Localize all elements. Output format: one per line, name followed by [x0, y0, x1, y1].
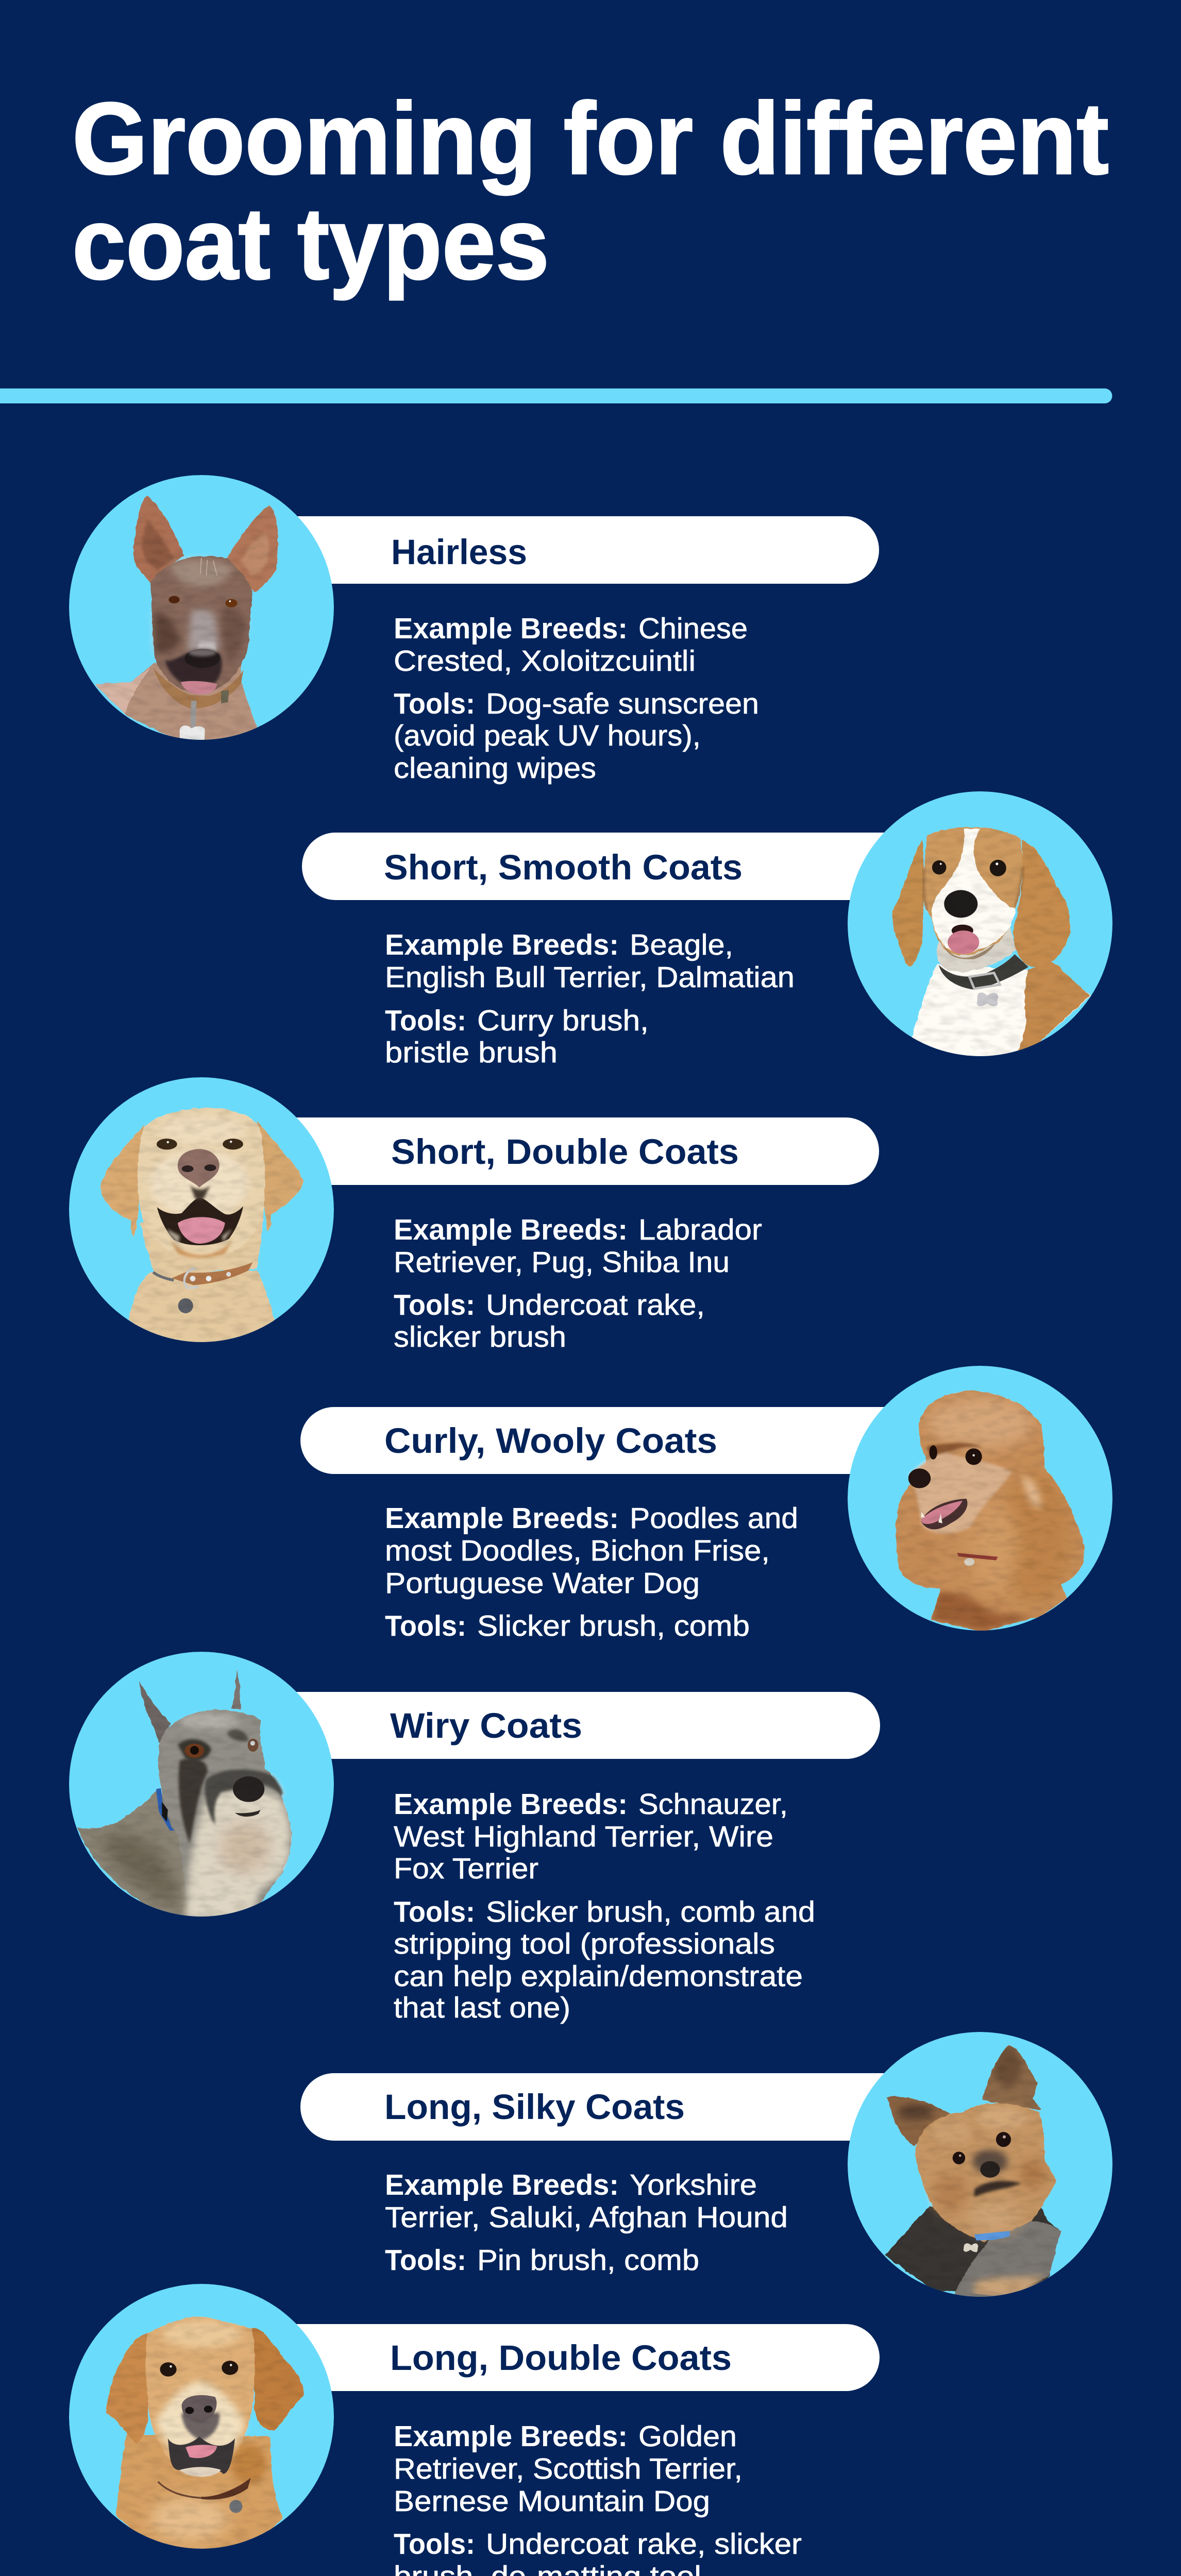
text: short double details: Labrador — [638, 1213, 762, 1246]
heading pill: curly wooly — [300, 1407, 980, 1474]
heading pill: short smooth: Short, Smooth Coats — [384, 848, 743, 887]
text: hairless details: (avoid peak UV hours), — [394, 719, 701, 752]
heading pill: long double — [201, 2324, 880, 2391]
heading pill: curly wooly: Curly, Wooly Coats — [384, 1421, 717, 1461]
text: wiry details — [394, 1788, 815, 2024]
text: short smooth details: Beagle, — [630, 928, 733, 961]
title: Grooming for different — [72, 81, 1109, 195]
panel: wiry coats — [69, 1652, 880, 2024]
text: short double details: Example Breeds: — [394, 1213, 628, 1246]
text: wiry details: that last one) — [394, 1991, 570, 2024]
text: curly wooly details — [385, 1502, 798, 1642]
header accent bar — [0, 388, 1112, 403]
text: hairless details: Example Breeds: — [394, 612, 628, 645]
heading pill: long double: Long, Double Coats — [390, 2338, 732, 2378]
text: short double details — [394, 1213, 762, 1353]
photo: schnauzer in circle — [69, 1652, 334, 1918]
text: wiry details: West Highland Terrier, Wire — [394, 1820, 773, 1853]
text: wiry details: can help explain/demonstrate — [394, 1960, 803, 1993]
text: long double details: Retriever, Scottish Terrier, — [394, 2452, 743, 2485]
text: long double details — [394, 2420, 802, 2576]
text: hairless details: Crested, Xoloitzcuintli — [394, 645, 696, 677]
photo: hairless dog in circle — [69, 475, 334, 741]
text: hairless details: Tools: — [394, 687, 475, 720]
text: short smooth details: Curry brush, — [477, 1004, 649, 1037]
photo: labrador in circle — [69, 1077, 334, 1343]
text: short smooth details: Tools: — [385, 1004, 466, 1037]
heading pill: wiry: Wiry Coats — [390, 1706, 582, 1745]
panel: curly, wooly coats — [300, 1366, 1112, 1642]
panel: hairless — [69, 475, 879, 785]
text: wiry details: Fox Terrier — [394, 1852, 538, 1885]
text: long silky details: Yorkshire — [630, 2168, 757, 2201]
heading pill: long silky — [300, 2073, 980, 2141]
panel: long, double coats — [69, 2284, 880, 2576]
title — [72, 81, 1109, 300]
text: wiry details: Schnauzer, — [638, 1788, 788, 1821]
text: long double details: Example Breeds: — [394, 2420, 628, 2453]
photo: beagle in circle — [848, 791, 1112, 1059]
text: long double details: Bernese Mountain Dog — [394, 2485, 710, 2518]
text: wiry details: Example Breeds: — [394, 1788, 628, 1821]
text: short smooth details: bristle brush — [385, 1036, 558, 1069]
text: wiry details: Tools: — [394, 1895, 475, 1928]
text: short double details: slicker brush — [394, 1320, 566, 1353]
heading pill: hairless — [201, 516, 879, 584]
heading pill: short double — [201, 1117, 879, 1185]
text: curly wooly details: Example Breeds: — [385, 1502, 619, 1535]
heading pill: wiry — [201, 1692, 880, 1759]
text: hairless details: Dog-safe sunscreen — [486, 687, 759, 720]
text: curly wooly details: Poodles and — [630, 1502, 798, 1535]
photo: poodle in circle — [848, 1366, 1112, 1632]
text: short double details: Tools: — [394, 1289, 475, 1321]
photo: yorkshire terrier in circle — [848, 2032, 1112, 2298]
title: coat types — [72, 187, 549, 300]
text: short double details: Retriever, Pug, Shiba Inu — [394, 1246, 730, 1279]
text: curly wooly details: Tools: — [385, 1609, 466, 1642]
text: wiry details: stripping tool (professionals — [394, 1927, 775, 1960]
heading pill: short double: Short, Double Coats — [391, 1132, 739, 1172]
text: curly wooly details: most Doodles, Bichon Frise, — [385, 1534, 770, 1567]
photo: golden retriever in circle — [69, 2284, 334, 2549]
heading pill: short smooth — [302, 833, 980, 900]
panel: short, double coats — [69, 1077, 879, 1353]
text: wiry details: Slicker brush, comb and — [486, 1895, 815, 1928]
text: long double details: Undercoat rake, slicker — [486, 2528, 802, 2561]
text: hairless details: Chinese — [638, 612, 748, 645]
text: long silky details: Terrier, Saluki, Afghan Hound — [385, 2201, 788, 2234]
text: long silky details: Example Breeds: — [385, 2168, 619, 2201]
text: short smooth details: English Bull Terrier, Dalmatian — [385, 961, 795, 994]
text: hairless details: cleaning wipes — [394, 752, 596, 785]
text: long double details: Tools: — [394, 2528, 475, 2561]
heading pill: long silky: Long, Silky Coats — [384, 2087, 685, 2127]
text: long silky details: Tools: — [385, 2244, 466, 2277]
text: short double details: Undercoat rake, — [486, 1289, 705, 1321]
text: long silky details — [385, 2168, 788, 2277]
text: short smooth details: Example Breeds: — [385, 928, 619, 961]
panel: short, smooth coats — [302, 791, 1112, 1069]
text: short smooth details — [385, 928, 795, 1069]
text: long silky details: Pin brush, comb — [477, 2244, 699, 2277]
text: hairless details — [394, 612, 759, 785]
panel: long, silky coats — [300, 2032, 1112, 2298]
text: curly wooly details: Slicker brush, comb — [477, 1609, 750, 1642]
heading pill: hairless: Hairless — [391, 532, 527, 572]
text: long double details: Golden — [638, 2420, 737, 2453]
text: curly wooly details: Portuguese Water Dog — [385, 1567, 700, 1600]
